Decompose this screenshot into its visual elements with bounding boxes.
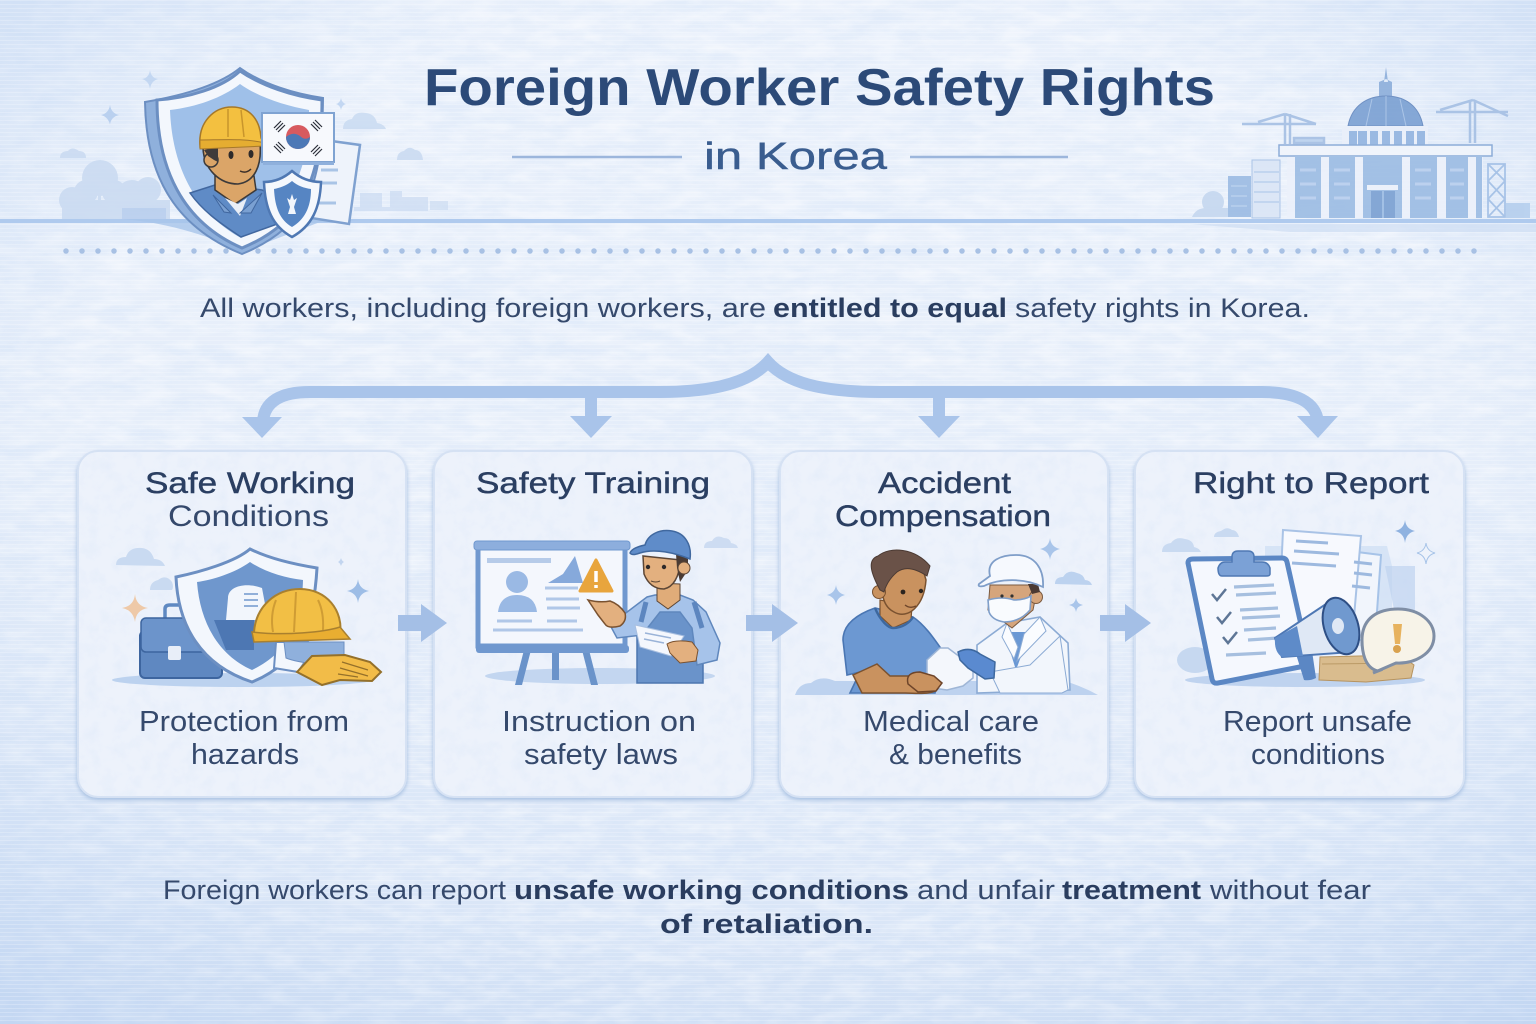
document	[305, 139, 360, 224]
description: Instruction on	[502, 706, 696, 738]
closing statement	[163, 875, 1371, 939]
closing statement: of retaliation.	[660, 909, 873, 939]
medic	[977, 555, 1070, 693]
description	[1223, 706, 1412, 771]
icon: instructor at presentation board	[474, 531, 738, 685]
description: Medical care	[863, 706, 1039, 738]
title: Foreign Worker Safety Rights	[424, 59, 1215, 117]
heading: Right to Report	[1193, 467, 1430, 500]
description: safety laws	[524, 739, 678, 771]
description: Report unsafe	[1223, 706, 1412, 738]
intro sentence: All workers, including foreign workers, are	[200, 293, 766, 323]
branching arrow	[242, 362, 1338, 438]
panel: accident compensation	[779, 451, 1109, 800]
card background	[77, 451, 407, 800]
closing statement: treatment	[1062, 875, 1201, 905]
description: hazards	[191, 739, 299, 771]
card background	[779, 451, 1109, 800]
arrow: card 2 to card 3	[746, 604, 798, 642]
arrow: card 3 to card 4	[1100, 604, 1151, 642]
card background	[433, 451, 753, 800]
icon: patient with bandaged arm and medic	[795, 538, 1098, 695]
heading: Safe Working	[145, 467, 355, 500]
closing statement: without fear	[1209, 875, 1371, 905]
heading	[145, 467, 355, 533]
icon: shield with worker, Korean flag and document	[120, 68, 360, 254]
panel: right to report	[1134, 451, 1465, 800]
columned hall	[1279, 145, 1492, 218]
description	[502, 706, 696, 771]
description: & benefits	[889, 739, 1022, 771]
description: Protection from	[139, 706, 349, 738]
closing statement: unsafe working conditions	[514, 875, 909, 905]
icon: shield, hard hat, briefcase and gloves	[112, 548, 381, 687]
heading: Compensation	[835, 500, 1051, 533]
panel: safety training	[433, 451, 753, 800]
arrow: card 1 to card 2	[398, 604, 447, 642]
subtitle with rules: in Korea	[704, 136, 888, 178]
description	[139, 706, 349, 771]
scaffold	[1488, 164, 1530, 218]
worker	[190, 107, 286, 237]
intro sentence: entitled to equal	[773, 293, 1007, 323]
icon: government building with cranes	[1192, 67, 1530, 218]
dome	[1342, 67, 1428, 145]
heading: Conditions	[168, 500, 329, 533]
Korean flag	[262, 113, 334, 165]
dotted divider	[66, 248, 1482, 254]
header scenery: left trees, clouds and horizon	[0, 70, 1536, 232]
large shield	[145, 68, 323, 254]
heading	[835, 467, 1051, 533]
small shield badge	[264, 171, 321, 237]
patient	[843, 550, 942, 693]
panel: safe working conditions	[77, 451, 407, 800]
heading: Safety Training	[476, 467, 710, 500]
icon: clipboard, megaphone and speech bubble	[1162, 520, 1435, 687]
closing statement: Foreign workers can report	[163, 875, 507, 905]
bandaged arm	[908, 648, 995, 692]
description	[863, 706, 1039, 771]
card background	[1134, 451, 1465, 800]
description: conditions	[1251, 739, 1385, 771]
side buildings	[1228, 160, 1280, 218]
cranes	[1242, 100, 1508, 144]
tree	[1192, 191, 1228, 217]
closing statement: and unfair	[917, 875, 1055, 905]
intro sentence: safety rights in Korea.	[1015, 293, 1310, 323]
intro sentence	[200, 293, 1310, 323]
heading: Accident	[878, 467, 1012, 500]
